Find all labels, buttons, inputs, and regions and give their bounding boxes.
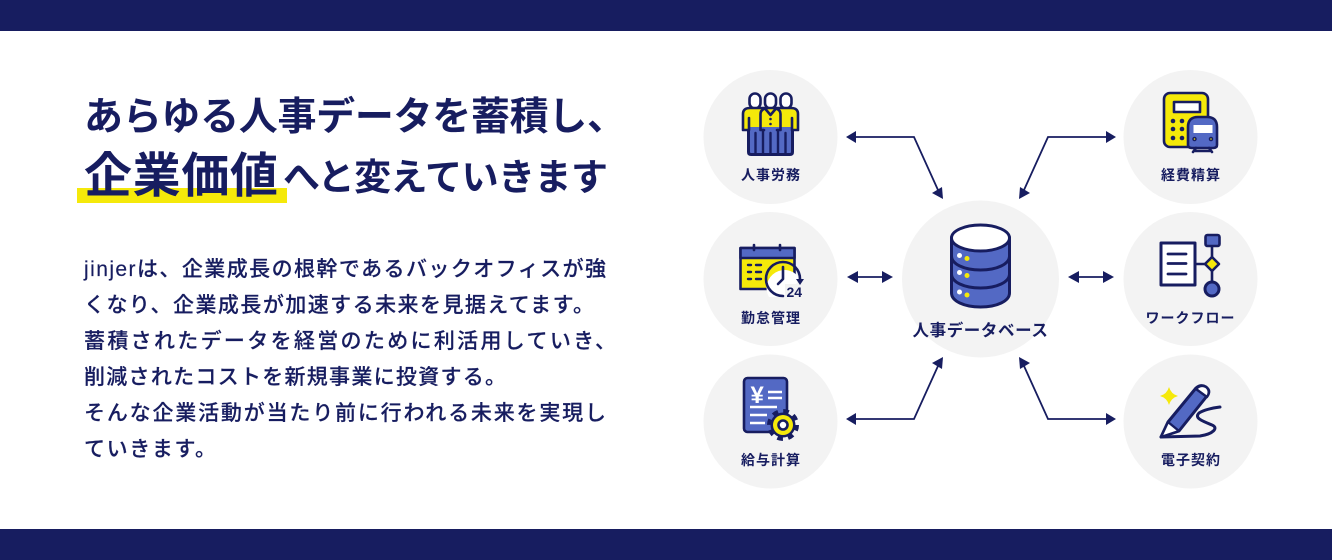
label: 電子契約 [1161,452,1221,468]
heading line 2 emphasis: 企業価値 [84,150,278,203]
heading highlight [77,188,287,203]
panel: 経費精算 [1124,70,1258,204]
icon: calendar and clock [740,245,805,299]
body text [83,258,616,461]
panel: 給与計算 [704,354,838,488]
icon: pen and signature [1160,386,1220,437]
panel: 勤怠管理 [704,212,838,346]
text: 24: 24 [786,284,802,300]
panel: 電子契約 [1124,354,1258,488]
panel: 人事労務 [704,70,838,204]
heading line 2 rest: へと変えていきます [283,157,608,198]
body text: ていきます。 [84,438,216,461]
body text: jinjerは、企業成長の根幹であるバックオフィスが強 [83,258,606,281]
arrow: bottom right [1019,357,1116,425]
arrow: top right [1019,131,1116,199]
label: 勤怠管理 [741,310,801,326]
icon: people [743,94,798,154]
label: 人事データベース [913,320,1048,340]
icon: workflow [1161,235,1220,296]
body text: 削減されたコストを新規事業に投資する。 [84,366,506,389]
bottom band [0,529,1332,560]
heading [77,95,626,203]
icon: payslip and gear: ¥ [750,382,764,409]
arrow: top left [846,131,943,199]
label: 人事労務 [741,167,801,183]
arrow: bottom left [846,357,943,425]
icon: calculator and train [1164,93,1217,152]
panel: 人事データベース [902,200,1059,358]
body text: くなり、企業成長が加速する未来を見据えてます。 [84,294,594,317]
body text: 蓄積されたデータを経営のために利活用していき、 [84,329,616,353]
label: 給与計算 [741,452,801,468]
label: ワークフロー [1146,310,1236,326]
top band [0,0,1332,31]
arrow: middle left [847,271,893,283]
panel: ワークフロー [1124,212,1258,346]
arrow: middle right [1068,271,1114,283]
heading line 1: あらゆる人事データを蓄積し、 [84,95,626,139]
label: 経費精算 [1161,167,1221,183]
icon: database [952,225,1010,307]
body text: そんな企業活動が当たり前に行われる未来を実現し [84,402,606,425]
